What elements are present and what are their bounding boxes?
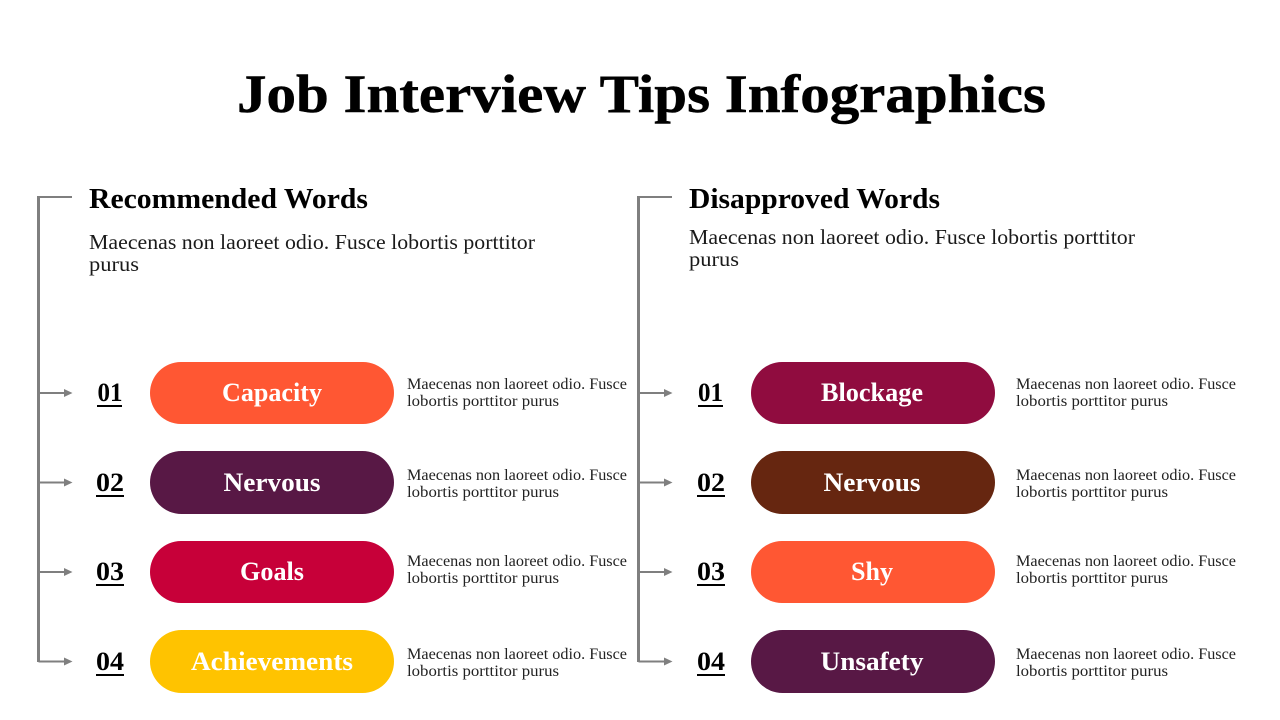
row 04: unsafety [697, 630, 1236, 693]
row 01: blockage: Maecenas non laoreet odio. Fusce [1016, 376, 1236, 393]
row 03: shy: lobortis porttitor purus [1016, 570, 1168, 587]
heading: disapproved words: Disapproved Words [689, 184, 940, 215]
row 02: nervous: Maecenas non laoreet odio. Fusce [407, 467, 627, 484]
heading: recommended words: Recommended Words [89, 184, 368, 215]
row 03: shy [697, 541, 1236, 603]
row 02: nervous [96, 451, 627, 514]
row 03: goals: 03 [96, 557, 124, 586]
bracket connector: disapproved [638, 196, 672, 666]
row 01: blockage [698, 362, 1236, 424]
row 03: goals: Goals [240, 557, 304, 586]
description: disapproved: purus [689, 247, 739, 271]
row 03: shy: Shy [851, 557, 893, 586]
row 04: achievements: Achievements [191, 647, 353, 676]
description: recommended [89, 230, 535, 276]
row 03: shy: Maecenas non laoreet odio. Fusce [1016, 553, 1236, 570]
row 01: blockage: 01 [698, 378, 723, 407]
row 04: unsafety: lobortis porttitor purus [1016, 663, 1168, 680]
row 04: achievements: 04 [96, 647, 124, 676]
row 01: capacity [97, 362, 627, 424]
row 02: nervous: 02 [96, 468, 124, 497]
row 03: goals [96, 541, 627, 603]
row 02: nervous: Nervous [824, 468, 920, 497]
panel: disapproved words [638, 184, 1236, 693]
description: disapproved [689, 225, 1135, 271]
panel: recommended words [38, 184, 627, 693]
row 01: capacity: 01 [98, 378, 122, 407]
bracket connector: recommended [38, 196, 72, 666]
description: recommended: Maecenas non laoreet odio. Fusce lobortis porttitor [89, 230, 535, 254]
row 02: nervous: lobortis porttitor purus [407, 484, 559, 501]
row 02: nervous: Nervous [224, 468, 320, 497]
row 04: unsafety: Unsafety [820, 647, 924, 676]
row 01: capacity: Capacity [222, 378, 322, 407]
row 01: blockage: lobortis porttitor purus [1016, 393, 1168, 410]
row 04: achievements: lobortis porttitor purus [407, 663, 559, 680]
row 04: achievements [96, 630, 627, 693]
description: recommended: purus [89, 252, 139, 276]
description: disapproved: Maecenas non laoreet odio. Fusce lobortis porttitor [689, 225, 1135, 249]
row 02: nervous: lobortis porttitor purus [1016, 484, 1168, 501]
row 02: nervous: 02 [697, 468, 725, 497]
row 02: nervous [697, 451, 1236, 514]
title: Job Interview Tips Infographics [237, 64, 1046, 124]
row 04: unsafety: Maecenas non laoreet odio. Fusce [1016, 646, 1236, 663]
row 03: goals: lobortis porttitor purus [407, 570, 559, 587]
row 04: unsafety: 04 [697, 647, 725, 676]
row 01: blockage: Blockage [821, 378, 923, 407]
row 01: capacity: lobortis porttitor purus [407, 393, 559, 410]
row 03: goals: Maecenas non laoreet odio. Fusce [407, 553, 627, 570]
row 03: shy: 03 [697, 557, 725, 586]
row 02: nervous: Maecenas non laoreet odio. Fusce [1016, 467, 1236, 484]
row 04: achievements: Maecenas non laoreet odio. Fusce [407, 646, 627, 663]
row 01: capacity: Maecenas non laoreet odio. Fusce [407, 376, 627, 393]
